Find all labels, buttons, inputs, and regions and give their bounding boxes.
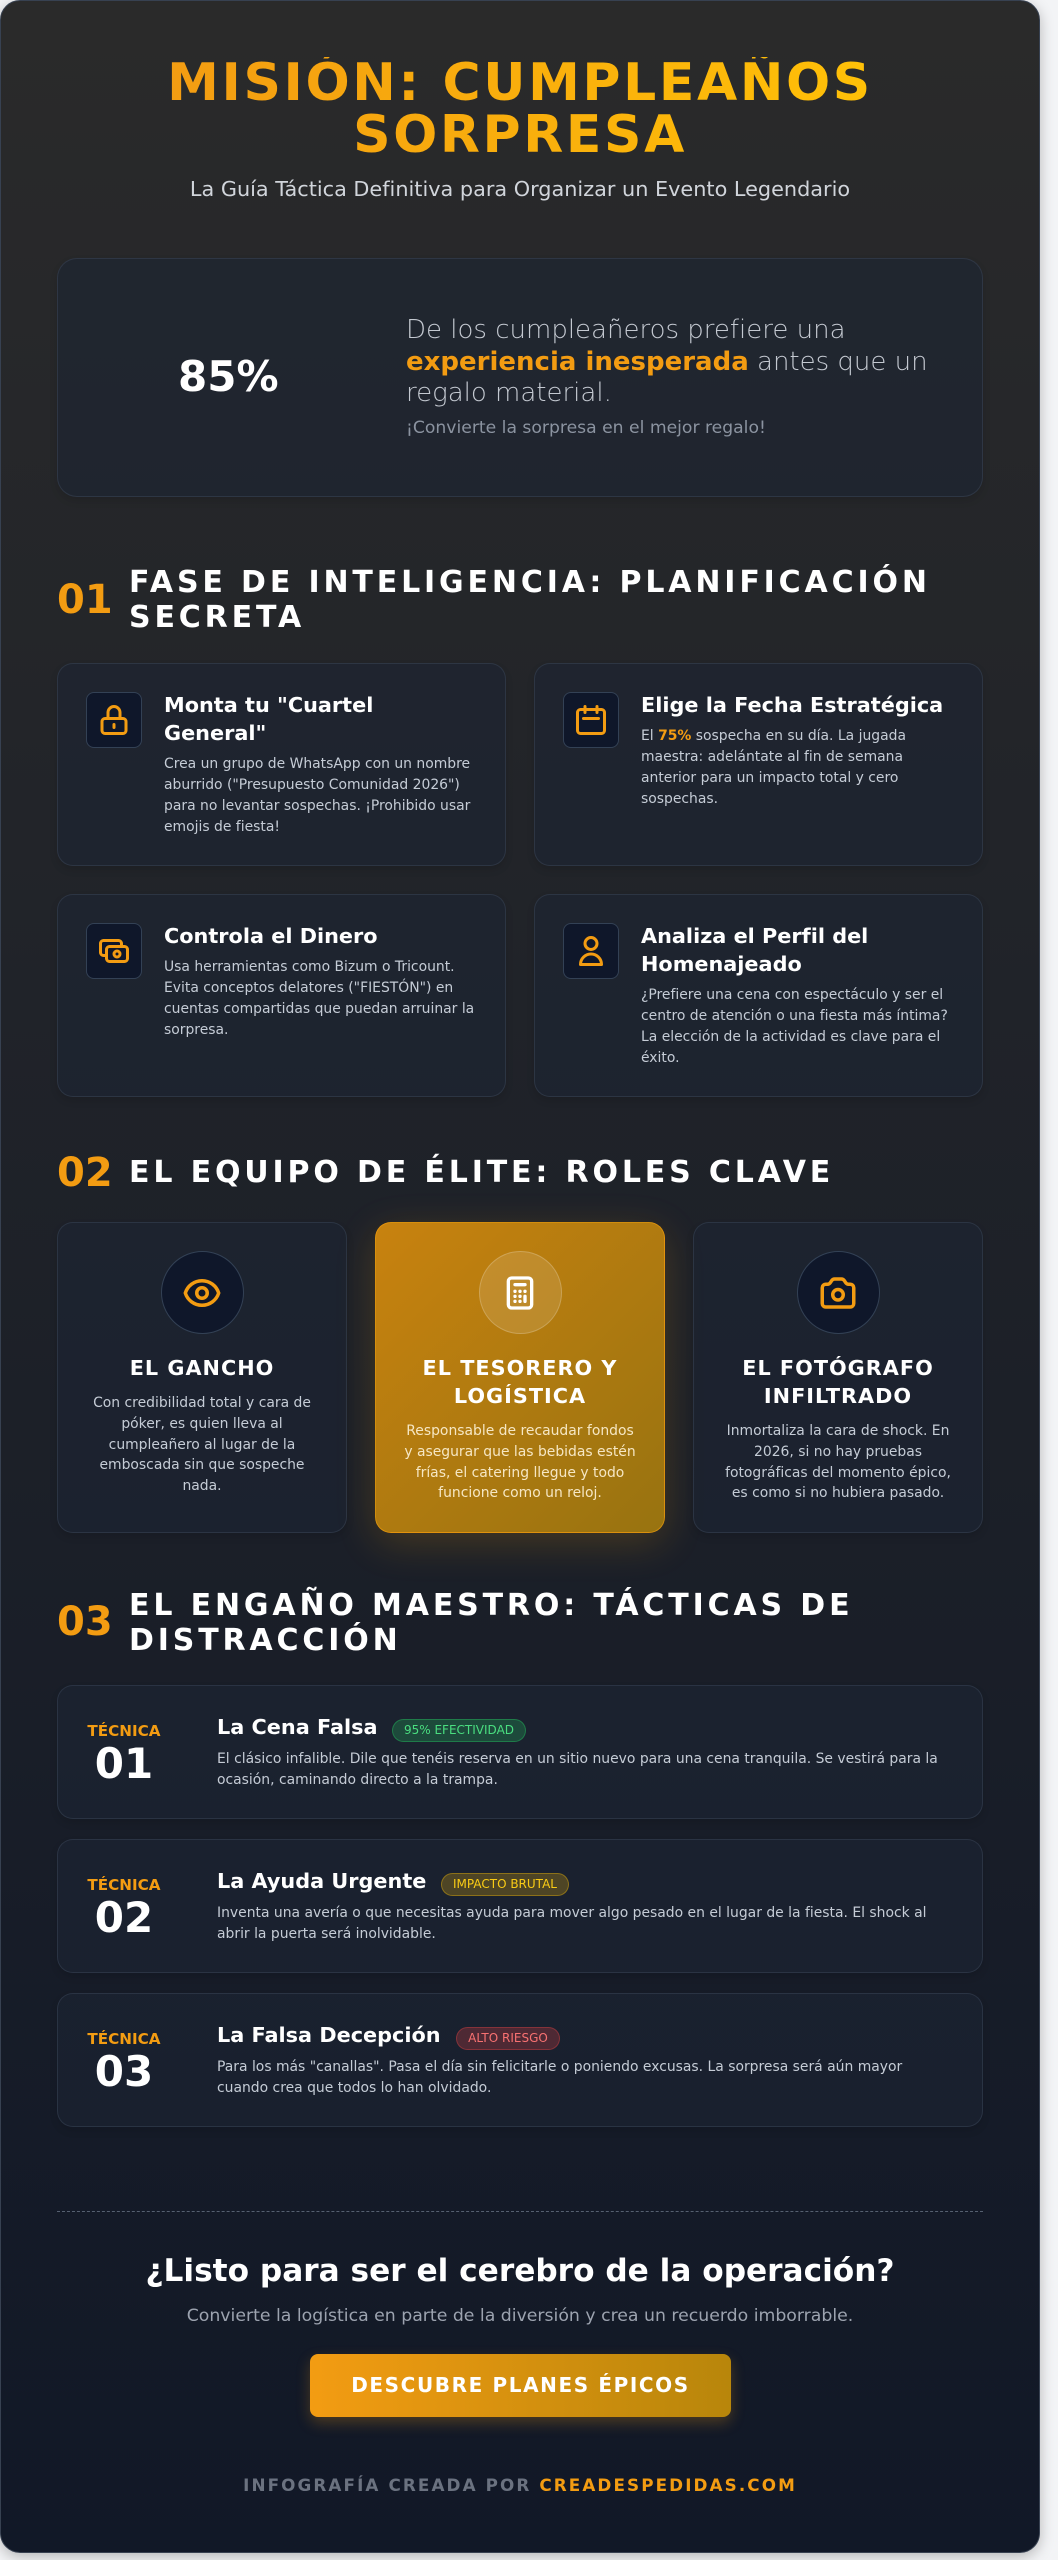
role title: [742, 1356, 934, 1408]
call to action heading: ¿Listo para ser el cerebro de la operación?: [145, 2253, 895, 2289]
badge: effectiveness: 95% EFECTIVIDAD: [404, 1723, 514, 1737]
card title: Homenajeado: [641, 952, 802, 976]
badge: risk: [456, 2027, 560, 2050]
panel: cuartel general: [57, 663, 506, 866]
panel: técnica 03: [57, 1993, 983, 2127]
technique label: TÉCNICA: [87, 2030, 161, 2048]
badge: effectiveness: [392, 1719, 526, 1742]
button: DESCUBRE PLANES ÉPICOS: [351, 2373, 690, 2397]
badge: risk: ALTO RIESGO: [468, 2031, 548, 2045]
role text: [725, 1423, 951, 1501]
stat note: ¡Convierte la sorpresa en el mejor regalo!: [406, 418, 766, 438]
panel: el tesorero (highlighted): [375, 1222, 665, 1533]
card text: emojis de fiesta!: [164, 819, 280, 835]
role title: [423, 1356, 617, 1408]
role text: Responsable de recaudar fondos: [406, 1423, 634, 1439]
technique number: 01: [95, 1739, 153, 1788]
role text: 2026, si no hay pruebas: [754, 1444, 922, 1460]
technique label: TÉCNICA: [87, 1876, 161, 1894]
icon: person: [563, 923, 619, 979]
heading: section 01: FASE DE INTELIGENCIA: PLANIFICACIÓN: [129, 565, 931, 600]
panel: fecha estratégica: [534, 663, 983, 866]
panel: perfil del homenajeado: [534, 894, 983, 1097]
role text: cumpleañero al lugar de la: [109, 1437, 295, 1453]
card text: [641, 987, 948, 1066]
stat number: 85%: [178, 352, 279, 401]
card text: Evita conceptos delatores ("FIESTÓN") en: [164, 980, 453, 996]
card title: [641, 924, 868, 976]
card text: aburrido ("Presupuesto Comunidad 2026"): [164, 777, 460, 793]
technique title: La Falsa Decepción: [217, 2023, 441, 2047]
role text: frías, el catering llegue y todo: [416, 1465, 624, 1481]
icon: lock: [86, 692, 142, 748]
stat description: [406, 315, 928, 408]
card title: [164, 693, 373, 744]
card text: Crea un grupo de WhatsApp con un nombre: [164, 756, 470, 772]
technique title: La Ayuda Urgente: [217, 1869, 426, 1893]
card text: ¿Prefiere una cena con espectáculo y ser el: [641, 987, 943, 1003]
heading: section 01: [129, 564, 931, 634]
heading: section 03: [129, 1586, 853, 1658]
title: [1, 57, 1039, 161]
heading: section 03: EL ENGAÑO MAESTRO: TÁCTICAS DE: [129, 1588, 853, 1623]
role text: funcione como un reloj.: [438, 1485, 602, 1501]
card text: El 75% sospecha en su día. La jugada: [641, 728, 906, 744]
technique text: [217, 1905, 926, 1942]
card title: Controla el Dinero: [164, 924, 378, 948]
button: [310, 2354, 731, 2417]
role text: emboscada sin que sospeche: [100, 1457, 304, 1473]
panel: controla el dinero: [57, 894, 506, 1097]
role title: INFILTRADO: [764, 1384, 912, 1408]
technique label: TÉCNICA: [87, 1722, 161, 1740]
stat description: experiencia inesperada antes que un: [406, 346, 928, 376]
icon: calculator: [478, 1251, 562, 1334]
section number 01: 01: [57, 577, 113, 623]
footer credit: INFOGRAFÍA CREADA POR CREADESPEDIDAS.COM: [243, 2475, 797, 2495]
role title: LOGÍSTICA: [454, 1384, 586, 1408]
stat description: regalo material.: [406, 378, 612, 408]
role title: EL FOTÓGRAFO: [742, 1356, 934, 1380]
badge: impact: IMPACTO BRUTAL: [453, 1877, 557, 1891]
panel: técnica 02: [57, 1839, 983, 1973]
role title: EL TESORERO Y: [423, 1356, 617, 1380]
card text: [641, 728, 906, 807]
panel: el gancho: [57, 1222, 347, 1533]
icon: eye: [160, 1251, 244, 1334]
badge: impact: [441, 1873, 569, 1896]
technique number: 02: [95, 1893, 153, 1942]
subtitle: La Guía Táctica Definitiva para Organizar un Evento Legendario: [190, 177, 850, 201]
card text: sospechas.: [641, 791, 718, 807]
stat description: De los cumpleañeros prefiere una: [406, 315, 846, 345]
card text: [164, 959, 474, 1038]
role text: es como si no hubiera pasado.: [732, 1485, 944, 1501]
technique text: Para los más "canallas". Pasa el día sin felicitarle o poniendo excusas. La sorpresa será aún mayor: [217, 2059, 902, 2075]
role text: y asegurar que las bebidas estén: [404, 1444, 636, 1460]
role text: póker, es quien lleva al: [121, 1416, 283, 1432]
card text: éxito.: [641, 1050, 680, 1066]
role text: nada.: [182, 1478, 222, 1494]
icon: camera: [796, 1251, 880, 1334]
card text: La elección de la actividad es clave para el: [641, 1029, 940, 1045]
technique text: cuando crea que todos lo han olvidado.: [217, 2080, 491, 2096]
section number 03: 03: [57, 1599, 113, 1645]
card title: Elige la Fecha Estratégica: [641, 693, 943, 717]
role title: EL GANCHO: [130, 1356, 274, 1380]
card title: Analiza el Perfil del: [641, 924, 868, 948]
role text: fotográficas del momento épico,: [725, 1465, 951, 1481]
card text: Usa herramientas como Bizum o Tricount.: [164, 959, 455, 975]
card text: para no levantar sospechas. ¡Prohibido usar: [164, 798, 470, 814]
role text: [404, 1423, 636, 1501]
panel: key statistic: [57, 258, 983, 497]
title: SORPRESA: [353, 105, 687, 165]
technique title: La Cena Falsa: [217, 1715, 378, 1739]
panel: técnica 01: [57, 1685, 983, 1819]
card text: maestra: adelántate al fin de semana: [641, 749, 903, 765]
section number 02: 02: [57, 1150, 113, 1196]
card title: Monta tu "Cuartel: [164, 693, 373, 717]
title: MISIÓN: CUMPLEAÑOS: [167, 53, 873, 113]
role text: [93, 1395, 311, 1494]
role text: Con credibilidad total y cara de: [93, 1395, 311, 1411]
technique text: [217, 1751, 938, 1788]
technique number: 03: [95, 2047, 153, 2096]
role text: Inmortaliza la cara de shock. En: [727, 1423, 949, 1439]
technique text: El clásico infalible. Dile que tenéis reserva en un sitio nuevo para una cena tranquila. Se vestirá para la: [217, 1751, 938, 1767]
card text: cuentas compartidas que puedan arruinar la: [164, 1001, 474, 1017]
technique text: abrir la puerta será inolvidable.: [217, 1926, 436, 1942]
card text: sorpresa.: [164, 1022, 228, 1038]
call to action text: Convierte la logística en parte de la diversión y crea un recuerdo imborrable.: [187, 2306, 853, 2326]
technique text: [217, 2059, 902, 2096]
card title: General": [164, 720, 266, 744]
icon: calendar: [563, 692, 619, 748]
technique text: ocasión, caminando directo a la trampa.: [217, 1772, 498, 1788]
card text: centro de atención o una fiesta más íntima?: [641, 1008, 948, 1024]
card text: [164, 756, 470, 835]
heading: section 03: DISTRACCIÓN: [129, 1622, 402, 1658]
heading: section 02: EL EQUIPO DE ÉLITE: ROLES CLAVE: [129, 1155, 834, 1190]
heading: section 01: SECRETA: [129, 600, 305, 634]
panel: el fotógrafo: [693, 1222, 983, 1533]
card text: anterior para un impacto total y cero: [641, 770, 898, 786]
technique text: Inventa una avería o que necesitas ayuda para mover algo pesado en el lugar de la fiesta. El shock al: [217, 1905, 926, 1921]
icon: money: [86, 923, 142, 979]
